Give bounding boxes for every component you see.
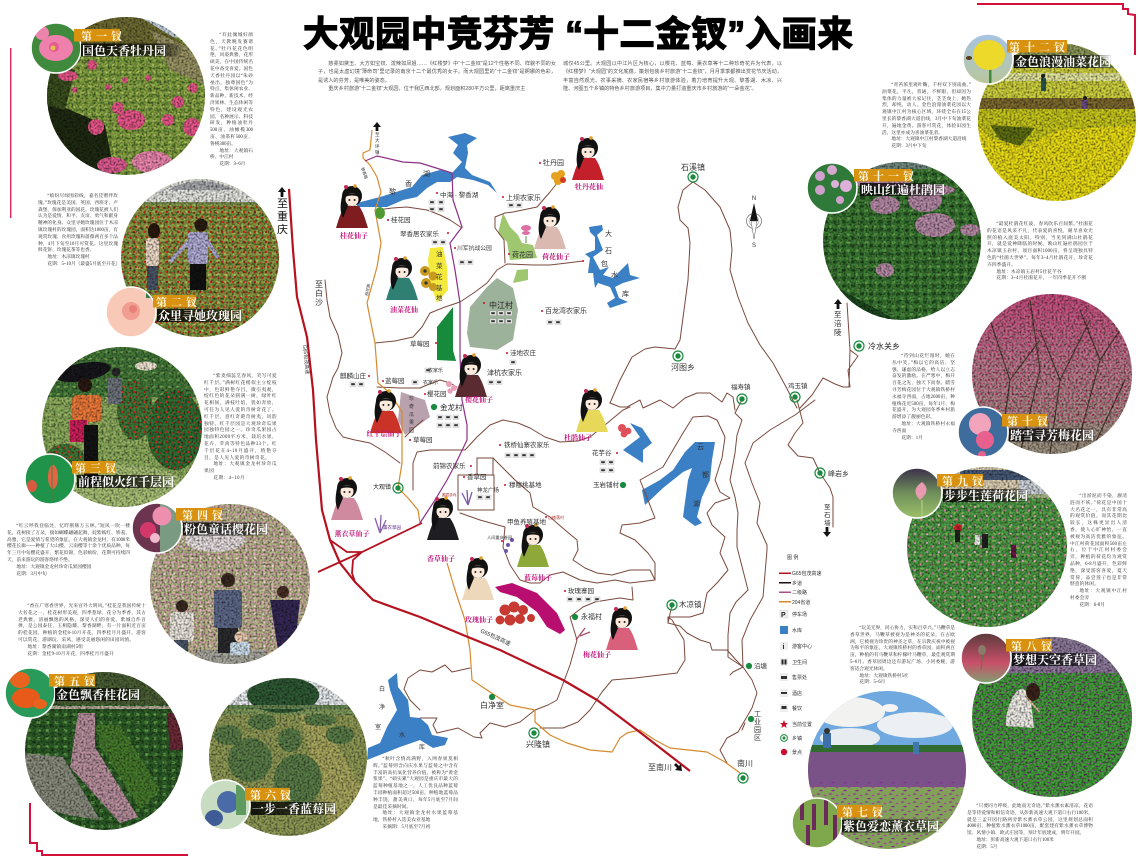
map labels: 工 <box>754 711 761 718</box>
legend: 204省道 <box>792 599 810 606</box>
panel: bottlebrush garden: 第三钗 <box>75 461 120 475</box>
rank tag <box>937 474 983 486</box>
rank tag <box>837 805 882 818</box>
panel: azalea garden <box>807 162 983 322</box>
fairy: azalea <box>576 388 608 432</box>
panel: verbena garden <box>961 633 1132 800</box>
map labels: 津杭农家乐 <box>487 368 522 377</box>
map labels: 人间重庆香园 <box>487 534 512 541</box>
legend: 餐饮 <box>792 705 802 712</box>
map labels: 桂花园 <box>391 215 410 224</box>
garden name <box>183 522 267 536</box>
fairies <box>331 136 638 650</box>
town markers <box>393 172 864 783</box>
photo <box>823 162 983 322</box>
text: rose: 地址：木凉镇玫瑰村 <box>47 255 90 260</box>
fairy: blueberry <box>517 523 549 567</box>
map labels: 重 <box>277 209 288 223</box>
legend: 游客中心 <box>792 643 812 650</box>
map labels: 白 <box>315 288 323 298</box>
fairy names: 牡丹花仙 <box>575 182 603 191</box>
fairy: herb <box>427 496 459 540</box>
legend: 停车场 <box>792 611 807 618</box>
map labels: 大 <box>375 137 380 144</box>
map labels: 湖 <box>423 169 430 178</box>
corner ornament: bottom left <box>30 803 188 855</box>
garden name <box>81 44 181 56</box>
land zones <box>498 213 537 260</box>
fairy names: 荷花仙子 <box>542 252 570 261</box>
map labels: 镇 <box>375 149 380 156</box>
panel: rose garden: 第二钗 <box>156 295 201 309</box>
text: cherry: 花期：3月中旬 <box>16 572 47 577</box>
fairy names: 香草仙子 <box>427 554 455 563</box>
text: blueberry: “秋叶含情高满野，入网春果莫相辉。”蓝莓则含向庆水果与蓝莓之中含有丰富的高抗氧化营养价值，被称为“黄金浆果”。“硕实累”大观园是重庆市最大的蓝莓种植基地之一，人工优良品种蓝莓丰园种植面积超过500亩，种植地蓝莓品种丰饶，甜美爽口，每年5月底至7月间是最佳采摘时间。 <box>373 757 458 810</box>
map labels: 香草园 <box>467 472 486 481</box>
map labels: 福寿镇 <box>731 382 751 391</box>
text: lotus: “出淤泥而不染，濯清涟而不妖。”荷花是中国十大名花之一，具有非常高的观赏价值，而其花期比较长，这株更显出人清香，使人心旷神怡，一直被视为高洁优雅的象征。中江村荷花园面积500亩左右，位于中江村村委会旁，种植的荷花均为观赏品种，6-8月盛开，色彩鲜艳，深受游客喜爱，夏天赏荷，品尝莲子也是非常惬意的休闲。 <box>1070 494 1127 587</box>
map labels: 蓝莓园 <box>385 376 404 385</box>
photo <box>209 677 369 838</box>
legend: 水库 <box>792 627 802 634</box>
map labels: 云 <box>697 443 704 451</box>
map labels: 至南川 <box>648 762 672 772</box>
rank tag <box>72 461 116 474</box>
man <box>194 218 208 232</box>
text: canola: 花期：3月中下旬 <box>891 144 927 149</box>
map labels: 沙 <box>315 298 323 307</box>
text: plum: 花期：1月 <box>901 436 923 441</box>
legend: 卫生间 <box>792 659 807 666</box>
panel: rose garden: 众里寻她玫瑰园 <box>158 308 242 323</box>
text: lotus: 地址：大观镇中江村村委会旁 <box>1070 589 1127 601</box>
panel: verbena garden: 第八钗 <box>1011 639 1056 653</box>
panel: lavender garden <box>792 691 968 852</box>
map labels: 至 <box>824 503 831 511</box>
map labels: 玫瑰寨园 <box>568 586 594 595</box>
text: azalea: 花期：3~4月杜鹃花开，一年四季花开不断 <box>996 276 1086 281</box>
garden name <box>55 688 141 701</box>
map labels: 中江村 <box>489 300 513 310</box>
photo <box>47 17 207 177</box>
fairy names: 桂花仙子 <box>340 231 368 240</box>
garden name <box>1012 653 1098 666</box>
fairy: lavender <box>331 476 363 520</box>
map labels: 川军抗战公园 <box>457 244 492 252</box>
map labels: 洼地农庄 <box>510 348 536 357</box>
map labels: 木凉镇 <box>679 599 702 609</box>
panel: osmanthus garden <box>5 668 184 831</box>
panel: canola garden: 金色浪漫油菜花园 <box>1015 54 1111 69</box>
rank tag <box>1006 639 1052 652</box>
map labels: 铁桥仙寨农家乐 <box>504 440 550 449</box>
map labels: 大 <box>605 229 612 238</box>
text: rose: “缤纷尽绿围彩线，嘉名佳赠伴玫瑰。”玫瑰花是美国、英国、西班牙、卢森堡、保加利亚的国花。玫瑰花被人们认为是爱情、和平、友谊、勇气和献身精神的化身。众里寻她玫瑰园位于木凉镇玫瑰村的玫瑰园，面积达1000亩，有观赏玫瑰、食用玫瑰和蔷薇两百多个品种，4月下旬至10月可赏花。这里玫瑰鲜花饼、玫瑰花茶等也香。 <box>38 194 118 253</box>
garden name <box>77 475 173 488</box>
garden name <box>157 309 242 322</box>
map labels: 坪 <box>375 143 380 150</box>
inset flower <box>31 23 81 73</box>
map labels: 石溪镇 <box>681 162 705 172</box>
intro text right: 城仅45公里。大观园以中江片区为核心，以樱花、蓝莓、薰衣草等十二种珍奇花卉为代表，以《红楼梦》“大观园”的文化底蕴，策划包装乡村旅游“十二金钗”，月月季季都推出赏花节庆活动，丰富自然观光、农事采摘、农家民宿等乡村旅游体验，着力培育提升大观、黎香湖、木凉、兴隆、河图五个乡镇的特色乡村旅游项目，集中力量打造重庆市乡村旅游的“一朵金花”。 <box>563 61 782 92</box>
panel: verbena garden: 梦想天空香草园 <box>1013 652 1097 667</box>
panel: blueberry garden: 第六钗 <box>250 788 295 802</box>
photo <box>907 467 1067 627</box>
text: bottlebrush: 地址：大观镇金龙村珍奇瓜果园 <box>204 462 277 474</box>
map labels: 沿塘 <box>754 661 768 670</box>
map labels: 基 <box>436 283 443 292</box>
map labels: 至 <box>315 280 323 289</box>
title: 大观园中竞芬芳 “十二金钗”入画来 <box>303 14 853 54</box>
photo <box>808 691 968 852</box>
map labels: 大观镇 <box>373 483 391 491</box>
map labels: 金龙村 <box>440 402 463 412</box>
text: azalea: 地址：木凉镇玉岩村5社花芋谷 <box>996 270 1062 275</box>
woman in white <box>1006 688 1034 728</box>
text: cherry: “红云呼我登临处，忆昨断肠万玉林。”短风一吹一楼花，花树接了万朵，揣如蝴蝶翩翩起舞，姹紫嫣红、娇羞、高雅，它是爱情与希望的象征。在大观镇金龙村，有1000米樱花长廊——种植了大山樱、云南樱等十余个优质品种。每年三月中旬樱花盛开，繁花似锦，色彩缤纷，花期可持续四天，前来游玩的游客络绎不绝。 <box>7 524 130 563</box>
panel: lavender garden: 紫色爱恋薰衣草园 <box>843 818 939 834</box>
text: plum: “待到山花烂漫时，她在丛中笑。”梅以它的高洁、坚强、谦虚的品格，给人以立志奋发的激励。在严寒中，梅开百花之先，独天下而春。踏雪寻芳梅花园位于大观镇铁桥村永福寺西面，占地2000亩，种植梅花近500亩，每年1月，梅花盛开，为大观园冬季乡村旅游增添了靓丽色彩。 <box>892 354 955 420</box>
map labels: 神龙广场 <box>477 486 500 494</box>
map labels: 中海 · 黎香湖 <box>440 190 479 199</box>
map labels: 涪 <box>834 318 842 328</box>
garden name <box>860 183 943 196</box>
map labels: 石 <box>824 511 831 519</box>
map labels: 水 <box>399 731 405 739</box>
inset rose <box>106 287 156 337</box>
legend: 景点 <box>792 749 802 756</box>
fairy names: 梅花仙子 <box>583 650 611 659</box>
text: bottlebrush: 花期：4~10月 <box>213 476 245 481</box>
direction arrows <box>278 122 842 771</box>
text: verbena: “玩美无界，同心协力，实和百草兴。”马鞭草是香草世界，马鞭草被视为是神圣的花朵，在古欧洲，它被视为珍贵的神圣之草，在宗教庆祝中被视为和平的象征。大观镇铁桥村的香草园，面积两百亩，种植的有马鞭草和柠檬叶马鞭草，最佳观赏期5~6月。香草园周边还有游玩广场、小河委婉，游客适合观光休闲。 <box>850 626 955 672</box>
map labels: 农家乐 <box>428 367 443 374</box>
intro text left: 慈柔如黛玉、大方如宝钗、泼辣如凤姐……《红楼梦》中“十二金钗”是12个性格不同、样貌不同的女子，也是太虚幻境“薄命司”里记录的南京十二个最优秀的女子。而大观园里的“十二金钗”是婀娜的色彩，是诱人的芬芳，是唯美的姿态。 <box>318 61 556 84</box>
map <box>277 122 900 783</box>
compass: S <box>752 243 756 249</box>
map labels: 湖 <box>693 499 700 508</box>
map labels: 庆 <box>277 222 288 236</box>
fairy: canola <box>386 256 418 300</box>
rank tag <box>1002 414 1047 426</box>
map labels: 薰衣草园 <box>383 524 401 531</box>
map labels: 草莓园 <box>410 339 430 348</box>
fairy names: 玫瑰仙子 <box>465 615 493 624</box>
map labels: 兴隆镇 <box>526 739 550 749</box>
legend: 乡镇 <box>792 735 802 742</box>
text: peony: 花期：3~6月 <box>219 162 245 167</box>
map labels: 区 <box>754 734 761 742</box>
map labels: 黎 <box>389 187 396 196</box>
fairy names: 蓝莓仙子 <box>524 573 552 582</box>
panel: canola garden: 第十二钗 <box>1009 40 1069 54</box>
map labels: 地 <box>436 293 443 302</box>
text: osmanthus: 花期：金桂9-10月开花，四季桂月月盛开 <box>27 652 114 657</box>
map labels: 至 <box>834 310 842 319</box>
map labels: 白 <box>379 685 385 693</box>
map labels: 南川 <box>737 758 753 768</box>
panel: peony garden <box>31 17 207 177</box>
legend: 二级路 <box>792 589 807 596</box>
panel: cherry garden: 粉色童话樱花园 <box>184 522 268 536</box>
legend: i <box>782 644 784 651</box>
legend: G65包茂高速 <box>792 570 821 577</box>
map labels <box>277 132 900 772</box>
map labels: 库 <box>419 743 425 751</box>
map labels: 奇 <box>409 403 414 410</box>
legend: 酒店 <box>792 690 802 697</box>
map labels: 珍 <box>409 395 414 402</box>
text: lavender <box>967 803 1093 850</box>
panel: rose garden <box>106 179 281 339</box>
panel: plum garden <box>958 294 1132 459</box>
map labels: 库 <box>622 289 629 298</box>
map labels: 花 <box>436 272 443 281</box>
map labels: 荷花园 <box>512 250 533 259</box>
fairy: cherry <box>455 353 487 397</box>
fairy names: 油菜花仙 <box>390 305 418 314</box>
compass: N <box>752 196 756 202</box>
umbrella and woman <box>58 362 111 382</box>
inset plum blossom <box>958 407 1008 459</box>
panel: lotus garden: 步步生莲荷花园 <box>944 488 1028 503</box>
text: cherry: 地址：大观镇金龙村珍奇瓜果园樱园 <box>16 565 91 570</box>
map labels: 麒麟山庄 <box>340 371 366 380</box>
text: blueberry: 地址：大观镇金龙村水果蓝莓基地，铁桥村入选美农业基地 <box>373 811 458 823</box>
fairy: peony <box>572 136 604 180</box>
side accent line <box>10 48 11 218</box>
panel: bottlebrush garden: 前程似火红千层园 <box>78 474 174 489</box>
fairy: plum <box>606 606 638 650</box>
inset blossom <box>132 503 182 553</box>
text: verbena: 地址：大观镇铁桥村5社 <box>859 674 909 679</box>
inset lavender <box>792 798 842 848</box>
panel: lotus garden: 第九钗 <box>942 474 987 488</box>
inset butterfly <box>961 633 1011 683</box>
map labels: 永福村 <box>581 612 602 621</box>
orange road south <box>447 563 740 773</box>
text: lavender: 地址：彭新高速大观下道口右行100米 <box>976 838 1054 843</box>
inset osmanthus <box>5 668 55 718</box>
text: osmanthus: “香在广寒香世界，光来宫外大明风。”桂花是我国传统十大名花之一。桂花树形美观，四季葱绿，花分为季香，其古老典雅，清丽飘逸的风格，深受人们的喜爱。紫城自件百弹，是公园泰任，玉相隐耀。黎香湖畔，有一片面积近百亩的桂花园，种植的金桂8-10月开花，四季桂月月盛开。游客可以赏花、游湖玩、采风，感受美丽悠闲的田园风情。 <box>18 604 146 643</box>
legend: 当前位置 <box>792 721 812 728</box>
map labels: G65包茂高速 <box>479 627 512 648</box>
map labels: 水 <box>611 270 618 279</box>
intro text left: 重庆乡村旅游“十二金钗”大观园，位于我区西北部，规划面积280平方公里，距离重庆主 <box>328 86 525 92</box>
panel: lavender garden: 第七钗 <box>842 805 887 819</box>
map labels: 油 <box>436 249 442 258</box>
map labels: 菜 <box>436 261 443 270</box>
panel: canola garden <box>963 34 1137 202</box>
rank tag <box>49 674 95 686</box>
garden name <box>1009 428 1094 442</box>
compass <box>746 196 762 249</box>
panel: osmanthus garden: 第五钗 <box>54 674 99 688</box>
text: canola: 地址：大观镇中江村黎香湖大道沿线 <box>891 137 966 142</box>
fairy: bottlebrush <box>370 389 402 433</box>
inset lotus <box>892 468 942 518</box>
rank tag <box>176 508 222 520</box>
photo <box>977 42 1137 202</box>
orange road <box>363 130 420 523</box>
garden name <box>943 489 1029 502</box>
map labels: 桃花路 <box>363 283 371 296</box>
legend: 图 例 <box>787 554 798 561</box>
map labels: 陵 <box>834 328 842 337</box>
fairy: osmanthus <box>336 184 368 228</box>
inset azalea <box>807 163 857 213</box>
text: peony: 地址：大观镇石桥、中江村 <box>210 149 253 160</box>
G65 highway <box>289 189 690 771</box>
map labels: 上坝农家乐 <box>506 193 541 202</box>
photo <box>42 347 203 515</box>
map labels: 香 <box>405 179 412 188</box>
map labels: 白净室 <box>480 700 504 710</box>
map labels: 穆穆桃基地 <box>509 480 542 489</box>
map labels: 鸡玉镇 <box>788 381 808 390</box>
panel: peony garden: 国色天香牡丹园 <box>82 43 166 58</box>
panel: peony garden: 第一钗 <box>81 29 126 43</box>
text: blueberry: 采摘期：5月底至7月初 <box>382 825 430 830</box>
legend: 售票处 <box>792 674 807 681</box>
visitors <box>176 600 188 612</box>
text: lavender: “只要同力呼吸，此地南无奇迹。”紫水薰衣素清凉，花语是等待爱情和相信奇迹。从彭新高速大观下道口右行100米，就是三孟开园行路两旁紫水薰衣草公园，这里规划总面积4000亩，种植紫水薰衣草1000亩，配套建有紫水薰衣草博物馆、风情小镇、欧式庄园等，预计年底建成，明年开园。 <box>967 804 1093 836</box>
panel: blueberry garden: 一步一香蓝莓园 <box>252 801 336 816</box>
text: plum: 地址：大观镇铁桥村永福寺西面 <box>892 422 955 434</box>
text: lotus: 花期：6-8月 <box>1079 603 1105 608</box>
text: azalea: “最爱杜鹃花红波，春风吹乐百间繁。”杜鹃花的花语是风采不凡，代表爱的喜悦，耐旱喜欢光照的植入庭美太阳。特别，当见到满山杜鹃花开，就是爱神降临的时候。映山红遍杜鹃园位于木凉镇玉岩村，项目面积1000亩，将呈现独具特色的“杜鹃大世界”。每年3~4月杜鹃花开，珍奇花卉四季盛开。 <box>987 222 1093 268</box>
highway spur <box>318 523 422 582</box>
map labels: 园 <box>409 428 414 434</box>
panel: plum garden: 第十钗 <box>1007 414 1052 428</box>
rank tag <box>245 788 290 800</box>
panel: bottlebrush garden <box>25 347 203 515</box>
map labels: 瓜 <box>409 412 414 418</box>
map labels: 花芋谷 <box>592 448 612 457</box>
purple road <box>365 156 467 523</box>
photo <box>972 637 1132 800</box>
rank tag <box>1007 40 1067 52</box>
rank tag <box>153 295 195 308</box>
rank tag <box>74 29 120 42</box>
map labels: 业 <box>754 717 761 726</box>
map labels: 草莓园 <box>413 435 432 444</box>
map labels: 墙 <box>824 518 831 527</box>
inset canola <box>963 34 1013 85</box>
inset flower <box>25 454 75 504</box>
map labels: 前锦农家乐 <box>433 461 466 470</box>
map labels: 果 <box>409 420 414 426</box>
brown roads <box>325 182 858 763</box>
flower sprites <box>375 170 631 640</box>
text: canola: “青苔浓里观叶鞠，千村双下别南曲。”油菜花，平凡，普通，不鲜眼，但却因为集体的力量被大家记住，茎茎虔上，她热烈，却纯，动人。金色浪漫油菜花园以大观镇中江村为核心区域，环绕全布在15公里长的黎香湖大道沿线，3月中下旬油菜花开，遍地金黄。游客可赏花，体验田园生活，这里亦成为喜油菜花者。 <box>882 83 971 136</box>
corner ornament: top right <box>977 4 1135 55</box>
map labels: 室 <box>375 723 381 731</box>
map labels: 冷水关乡 <box>868 341 900 351</box>
map labels: 净 <box>379 703 385 711</box>
attraction dots <box>368 162 618 592</box>
fairy names: 红千层仙子 <box>366 429 402 438</box>
legend: P <box>781 612 786 619</box>
map labels: 百龙湾农家乐 <box>545 306 587 315</box>
map labels: 都 <box>702 471 709 479</box>
panel: cherry garden <box>132 503 310 665</box>
panel: azalea garden: 映山红遍杜鹃园 <box>861 182 945 197</box>
photo <box>972 294 1132 454</box>
photo <box>24 671 184 831</box>
photo <box>150 504 310 665</box>
fairy names: 杜鹃仙子 <box>564 433 592 442</box>
map labels: 包 <box>601 259 608 268</box>
fairy names: 薰衣草仙子 <box>334 529 370 538</box>
panel: osmanthus garden: 金色飘香桂花园 <box>56 687 140 702</box>
fairy: lotus <box>534 205 566 249</box>
map labels: 山楂落村 <box>548 514 564 520</box>
map labels: 河图乡 <box>671 362 695 372</box>
photo <box>121 179 281 339</box>
map labels: 圆君游戏 <box>442 492 457 497</box>
panel: blueberry garden <box>200 677 369 838</box>
text: verbena: 花期：5~6月 <box>859 680 885 685</box>
map labels: 园 <box>754 726 761 734</box>
map labels: 至 <box>277 198 288 210</box>
legend <box>779 554 821 756</box>
garden name <box>251 802 336 815</box>
woman <box>148 223 160 239</box>
map labels: 农家乐 <box>423 379 438 386</box>
map labels: 石 <box>605 247 612 255</box>
text: osmanthus: 地址：黎香湖镇南湖村5组 <box>27 645 83 650</box>
rank tag <box>854 169 912 182</box>
fairy: rose <box>462 556 494 600</box>
text: bottlebrush: “紫麦细蕊烹春风，笑写可爱红千层。”满树红花梢似主立绽枝中，色彩鲜艳夺目，微引夷观，绽红色的花朵圆满一树，绿叶红花相间，满枝吐焰，犹如奔放，可任为人见人爱的奇树奇花了。红千层，意红奇葩奇树夷，风韵独特。红千层园是大观珍奇瓜果园独特色园之一。珍奇瓜果园占地面积2000平方米，栽培水果、花卉、苹肉等特色品种33个。红千层花在4~10月盛开，娇艳夺目，是人见人爱的奇树奇花。 <box>204 374 277 461</box>
garden name <box>842 820 939 832</box>
map labels: 峰岩乡 <box>828 469 849 478</box>
map labels: 樱花园 <box>427 389 446 398</box>
lakes <box>357 133 715 760</box>
text: rose: 花期：5~10月（最盛5月底至开花） <box>47 262 120 267</box>
panel: azalea garden: 第十一钗 <box>858 169 918 183</box>
inset berries <box>200 780 250 830</box>
legend: 乡道 <box>792 580 802 587</box>
map labels: 牡丹园 <box>543 158 564 167</box>
service icons <box>350 200 614 602</box>
map labels: 玉岩铺村 <box>593 480 620 489</box>
fairy names: 樱花仙子 <box>465 395 493 404</box>
map labels: 甲鱼养殖基地 <box>507 517 546 526</box>
fairy names <box>334 182 611 659</box>
garden name <box>1014 55 1111 68</box>
text: lavender: 花期：5月 <box>976 845 998 850</box>
panel: cherry garden: 第四钗 <box>182 508 227 522</box>
panel: plum garden: 踏雪寻芳梅花园 <box>1010 428 1094 442</box>
panel: lotus garden <box>892 467 1067 627</box>
map labels: 黎香路 <box>360 166 370 180</box>
map labels: 至 <box>375 132 380 137</box>
map labels: 翠香居农家乐 <box>400 229 440 238</box>
text: peony: “有此倾城好颜色，天教晚发赛诸花。”牡丹花花色明艳，风姿典雅，花形硕美，在中国传统名花中备受喜爱。国色天香牡丹园以“朱砂垒出，独尊国色”为特点，集休闲农业、新品种、新技术、经济果林、生态休闲等特色，建设观光农园、名种展示、科技研发，种植油牡丹500亩、油橄榄300亩、油茶籽500亩、鲁桃300亩。 <box>210 33 253 147</box>
map labels: G65包茂高速 <box>301 344 311 375</box>
